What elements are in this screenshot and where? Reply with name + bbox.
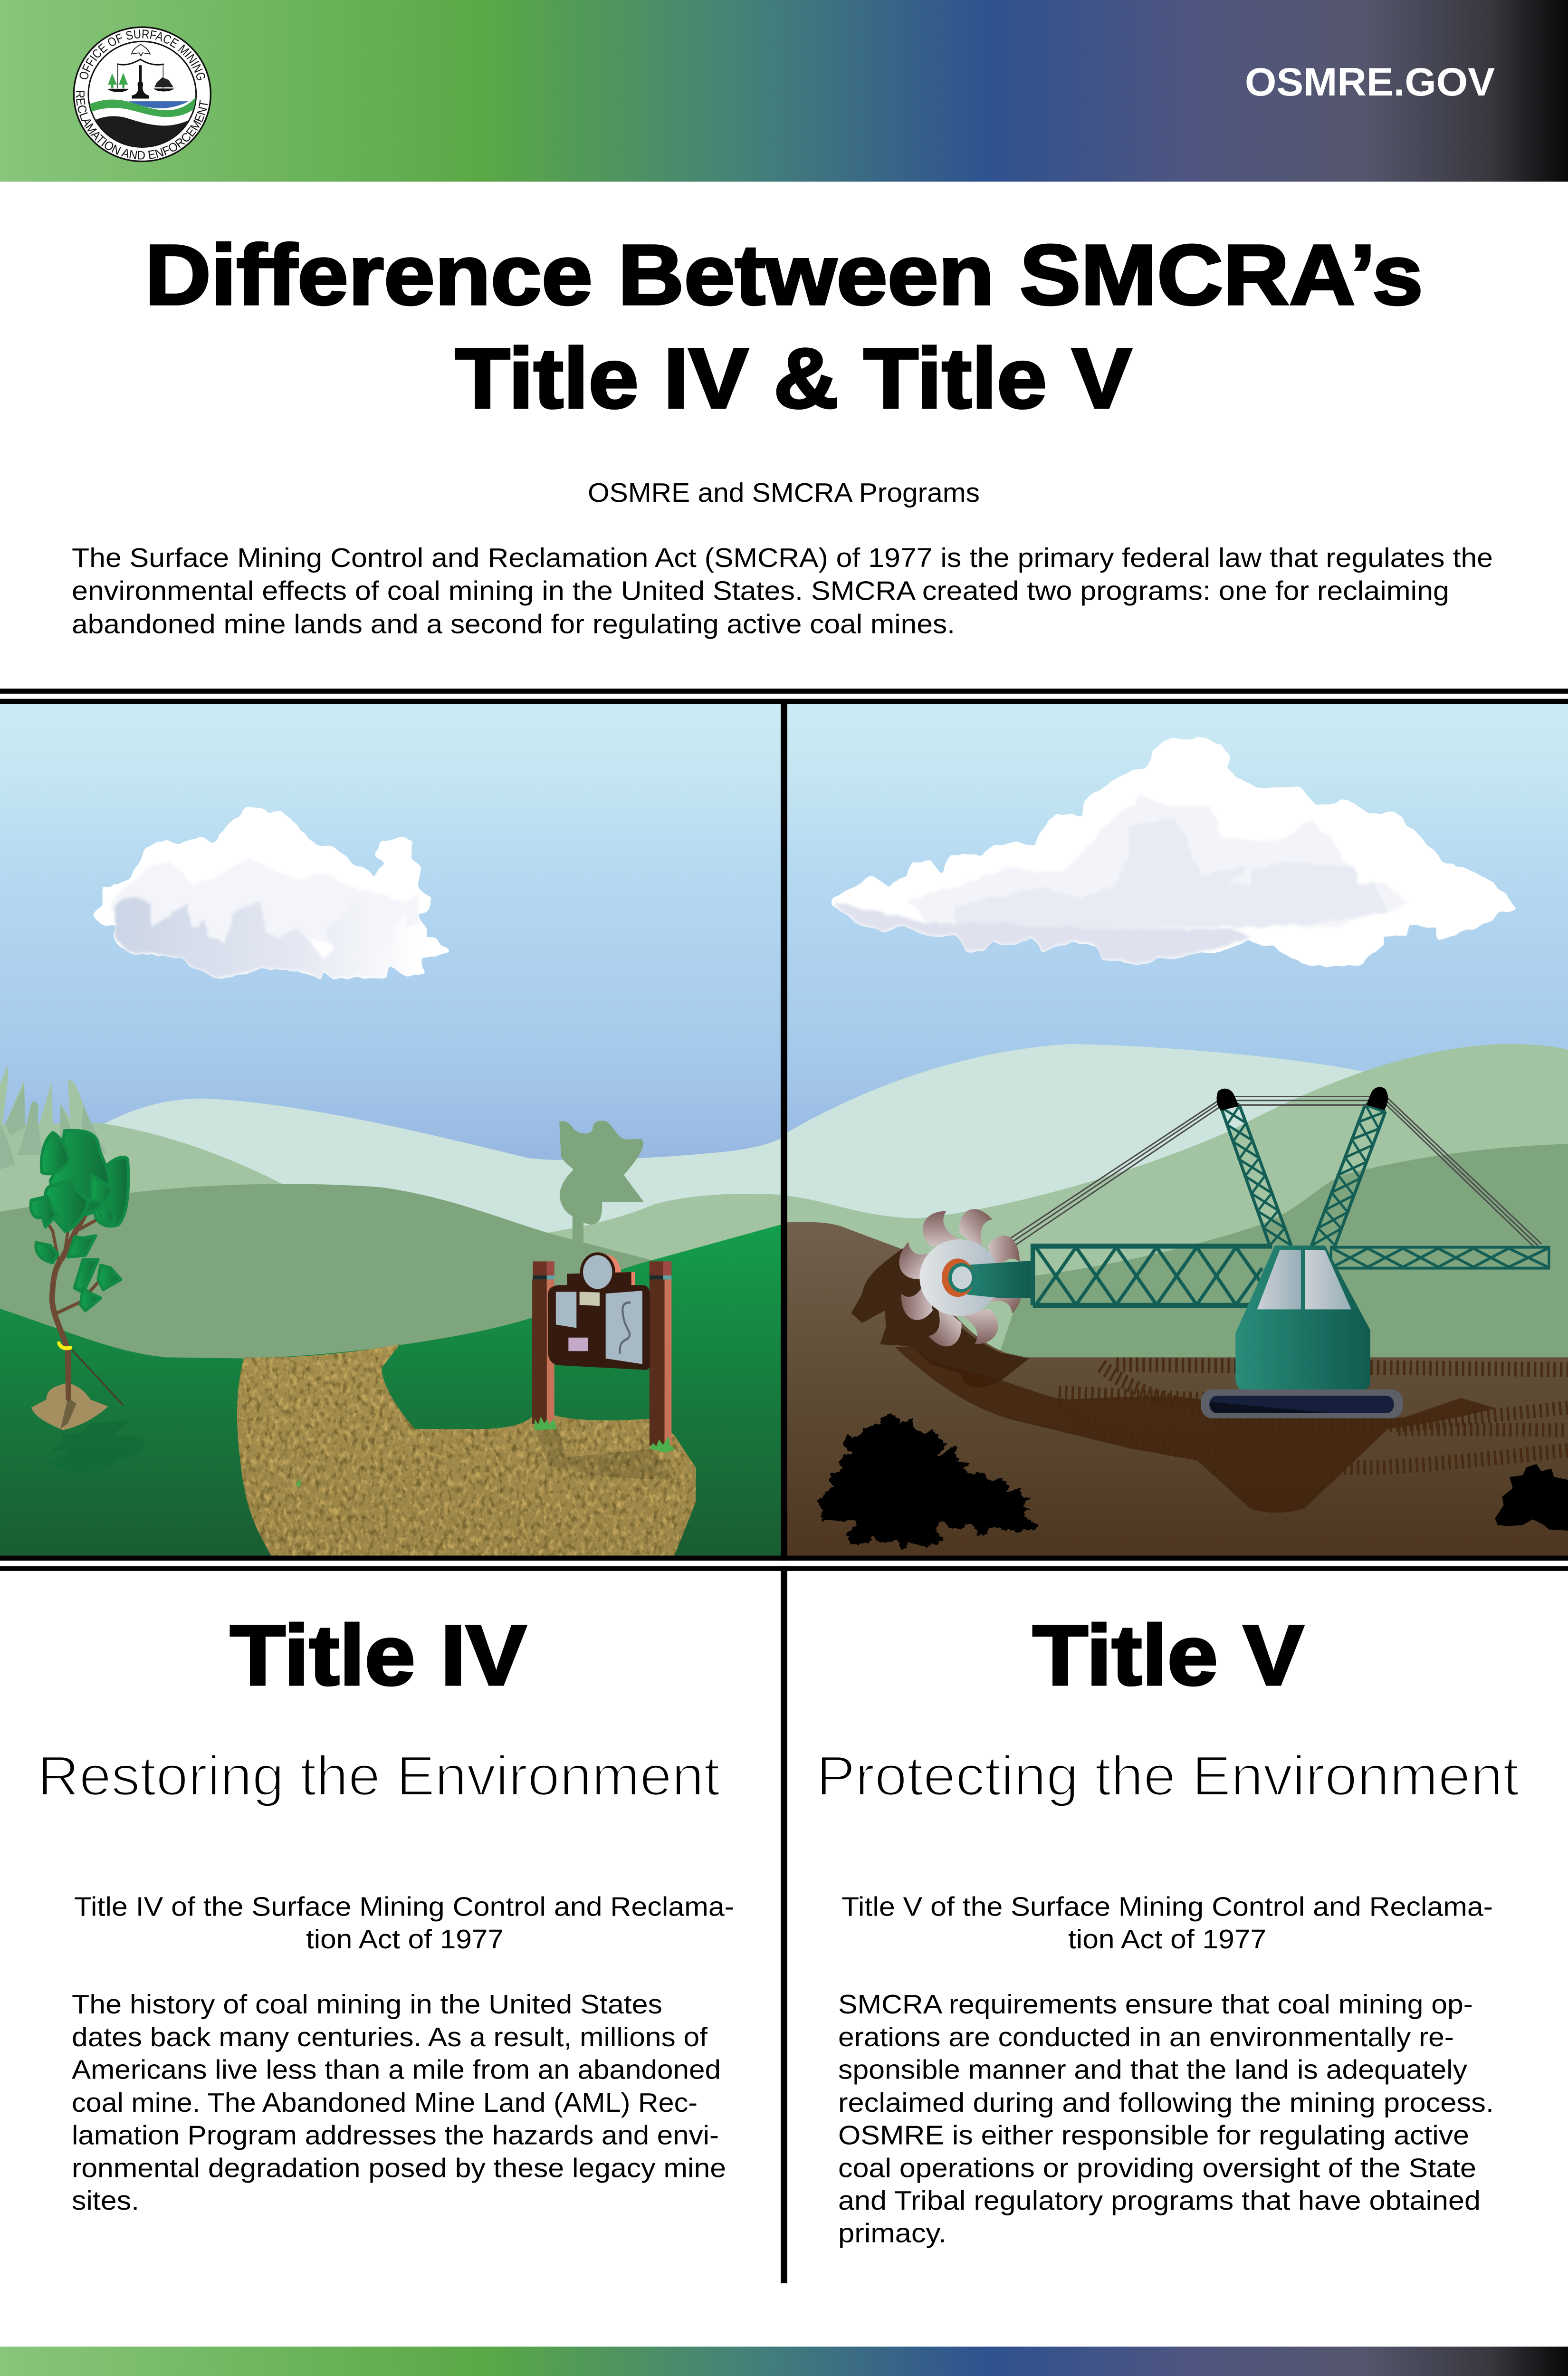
panel: Title V active mining illustration bbox=[779, 704, 1568, 1559]
dark hill bbox=[0, 1184, 652, 1359]
tire tracks bbox=[1059, 1365, 1568, 1467]
Title V body text bbox=[838, 1990, 1494, 2248]
logo: OSMRE seal: RECLAMATION AND ENFORCEMENT bbox=[73, 90, 211, 163]
park information sign bbox=[532, 1252, 675, 1453]
distant tree silhouette bbox=[559, 1121, 644, 1245]
sapling tree bbox=[31, 1131, 145, 1473]
bucket wheel excavator bbox=[892, 1087, 1549, 1418]
Title IV body text: coal mine. The Abandoned Mine Land (AML) Rec- bbox=[72, 2088, 698, 2118]
tree shadow bbox=[50, 1420, 145, 1473]
OSMRE.GOV link text: OSMRE.GOV bbox=[1245, 60, 1495, 104]
trunk and branches bbox=[52, 1200, 93, 1398]
Title IV act name: tion Act of 1977 bbox=[306, 1925, 504, 1954]
Title V act name: tion Act of 1977 bbox=[1068, 1925, 1266, 1954]
excavation shadow bbox=[851, 1248, 1029, 1388]
logo: OSMRE seal bbox=[73, 27, 211, 163]
divider lines bbox=[0, 689, 1568, 2283]
Title V heading: Title V bbox=[1033, 1608, 1304, 1703]
Title V body text: primacy. bbox=[838, 2218, 947, 2248]
Title IV body text: The history of coal mining in the United States bbox=[72, 1990, 662, 2020]
bucket wheel bbox=[892, 1201, 1029, 1355]
main title: Title IV & Title V bbox=[455, 331, 1132, 426]
background hills bbox=[787, 1044, 1383, 1311]
leaves bbox=[31, 1131, 128, 1311]
cables bbox=[968, 1096, 1541, 1274]
small coal pile right bbox=[1495, 1464, 1568, 1531]
large coal pile bbox=[818, 1414, 1037, 1550]
boom truss bbox=[1033, 1246, 1272, 1305]
Title V body text: OSMRE is either responsible for regulating active bbox=[838, 2120, 1469, 2151]
column: Title IV bbox=[38, 1608, 734, 2216]
Title IV body text: sites. bbox=[72, 2186, 139, 2216]
intro subheading: OSMRE and SMCRA Programs bbox=[588, 478, 980, 508]
cloud bbox=[93, 807, 450, 981]
Title IV act name: Title IV of the Surface Mining Control and Reclama- bbox=[74, 1892, 734, 1922]
Title IV body text bbox=[72, 1990, 726, 2216]
Title IV subheading: Restoring the Environment bbox=[38, 1745, 720, 1807]
distant conifers bbox=[0, 1065, 106, 1169]
far hills bbox=[105, 1099, 781, 1233]
Title V body text: reclaimed during and following the mining process. bbox=[838, 2088, 1494, 2118]
footer gradient bar bbox=[0, 2347, 1568, 2376]
Title V subheading: Protecting the Environment bbox=[816, 1745, 1519, 1807]
Title V body text: and Tribal regulatory programs that have obtained bbox=[838, 2186, 1481, 2216]
Title IV body text: lamation Program addresses the hazards and envi- bbox=[72, 2120, 719, 2151]
Title V body text: sponsible manner and that the land is adequately bbox=[838, 2055, 1467, 2085]
cab bbox=[1235, 1245, 1370, 1389]
Title V body text: coal operations or providing oversight of the State bbox=[838, 2153, 1476, 2183]
green foreground bbox=[0, 1225, 781, 1559]
Title IV heading: Title IV bbox=[230, 1608, 526, 1703]
Title V act name: Title V of the Surface Mining Control and Reclama- bbox=[841, 1892, 1493, 1922]
logo: OSMRE seal: OFFICE OF SURFACE MINING bbox=[76, 27, 209, 82]
Title IV body text: ronmental degradation posed by these legacy mine bbox=[72, 2153, 726, 2183]
panel: Title IV restored landscape illustration bbox=[0, 704, 781, 1559]
Title V body text: erations are conducted in an environmentally re- bbox=[838, 2022, 1454, 2052]
intro paragraph: environmental effects of coal mining in the United States. SMCRA created two programs: one for reclaiming bbox=[72, 576, 1449, 606]
counterweight truss bbox=[1331, 1247, 1549, 1268]
intro paragraph: abandoned mine lands and a second for regulating active coal mines. bbox=[72, 609, 955, 639]
intro paragraph: The Surface Mining Control and Reclamation Act (SMCRA) of 1977 is the primary federal law that regulates the bbox=[72, 543, 1493, 573]
column: Title V bbox=[816, 1608, 1519, 2248]
soil mound bbox=[31, 1383, 108, 1430]
crawler track bbox=[1201, 1389, 1403, 1418]
pit shadow bbox=[895, 1347, 1496, 1513]
masts bbox=[1221, 1104, 1386, 1245]
cloud bbox=[833, 738, 1516, 966]
intro paragraph bbox=[72, 543, 1493, 639]
header gradient bar bbox=[0, 0, 1568, 182]
Title V act name bbox=[841, 1892, 1493, 1954]
Title IV body text: Americans live less than a mile from an abandoned bbox=[72, 2055, 721, 2085]
main title bbox=[145, 228, 1423, 426]
brown mined ground bbox=[779, 1222, 1568, 1559]
gravel path bbox=[237, 1344, 696, 1559]
Title IV body text: dates back many centuries. As a result, millions of bbox=[72, 2022, 708, 2052]
Title V body text: SMCRA requirements ensure that coal mining op- bbox=[838, 1990, 1473, 2020]
main title: Difference Between SMCRA’s bbox=[145, 228, 1423, 323]
Title IV act name bbox=[74, 1892, 734, 1954]
